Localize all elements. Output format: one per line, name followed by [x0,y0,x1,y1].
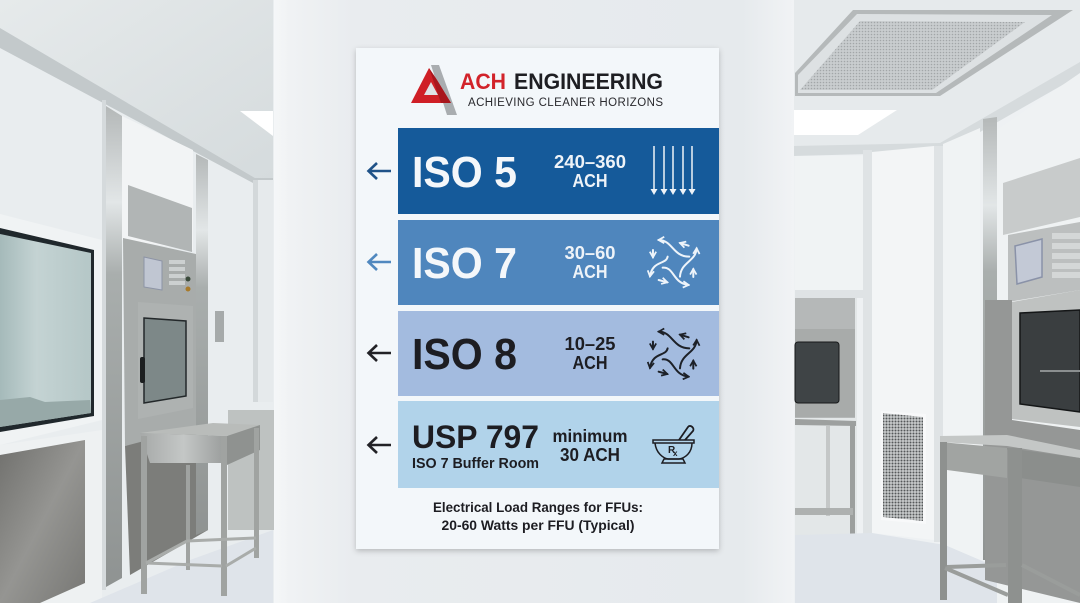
panel: ISO 7 [398,220,719,305]
background: left cleanroom [0,0,276,603]
background: right steel table [940,435,1080,603]
icon: turbulent airflow dark [650,332,697,377]
subheading: ISO 7 Buffer Room [412,456,539,472]
icon: turbulent airflow light [650,240,697,285]
rate: ISO 5: ACH [572,171,608,191]
icon: mortar and pestle: x [673,449,678,458]
icon: mortar and pestle [653,426,694,463]
logo [411,65,663,115]
arrow: USP 797 [368,437,391,453]
icon: laminar downward airflow [650,146,696,195]
footer note: 20-60 Watts per FFU (Typical) [442,517,634,533]
arrow: ISO 7 [368,254,391,270]
footer note: Electrical Load Ranges for FFUs: [433,499,643,515]
heading: ISO 5: ISO 5 [412,148,517,197]
rate: ISO 7: 30–60 [564,243,616,263]
tagline: ACHIEVING CLEANER HORIZONS [468,97,663,109]
arrow: ISO 8 [368,345,391,361]
rate: ISO 8: ACH [572,353,608,373]
arrow: ISO 5 [368,163,391,179]
heading: USP 797: USP 797 [412,419,539,455]
rate: ISO 8 [564,334,616,373]
rate: ISO 7: ACH [572,262,608,282]
company name: ACH [460,69,506,94]
background: right cleanroom [793,0,1080,603]
panel: ISO 5 [398,128,719,214]
icon: mortar and pestle: R [668,445,676,456]
heading: ISO 8: ISO 8 [412,330,517,379]
footer note [433,499,643,533]
background: ceiling filter unit [795,10,1073,96]
rate: ISO 8: 10–25 [564,334,616,354]
rate: ISO 5 [554,152,626,191]
rate: USP 797: minimum [552,426,628,446]
rate: ISO 7 [564,243,616,282]
sign board [356,48,719,549]
rate: ISO 5: 240–360 [554,152,626,172]
background: central wall [274,0,794,603]
panel: USP 797 [398,401,719,488]
company name dark: ENGINEERING [514,69,663,94]
rate: USP 797 [552,426,628,465]
panel: ISO 8 [398,311,719,396]
heading: ISO 7: ISO 7 [412,239,517,288]
logo mark [411,65,457,115]
rate: USP 797: 30 ACH [560,445,620,465]
background: left steel table [140,423,260,596]
